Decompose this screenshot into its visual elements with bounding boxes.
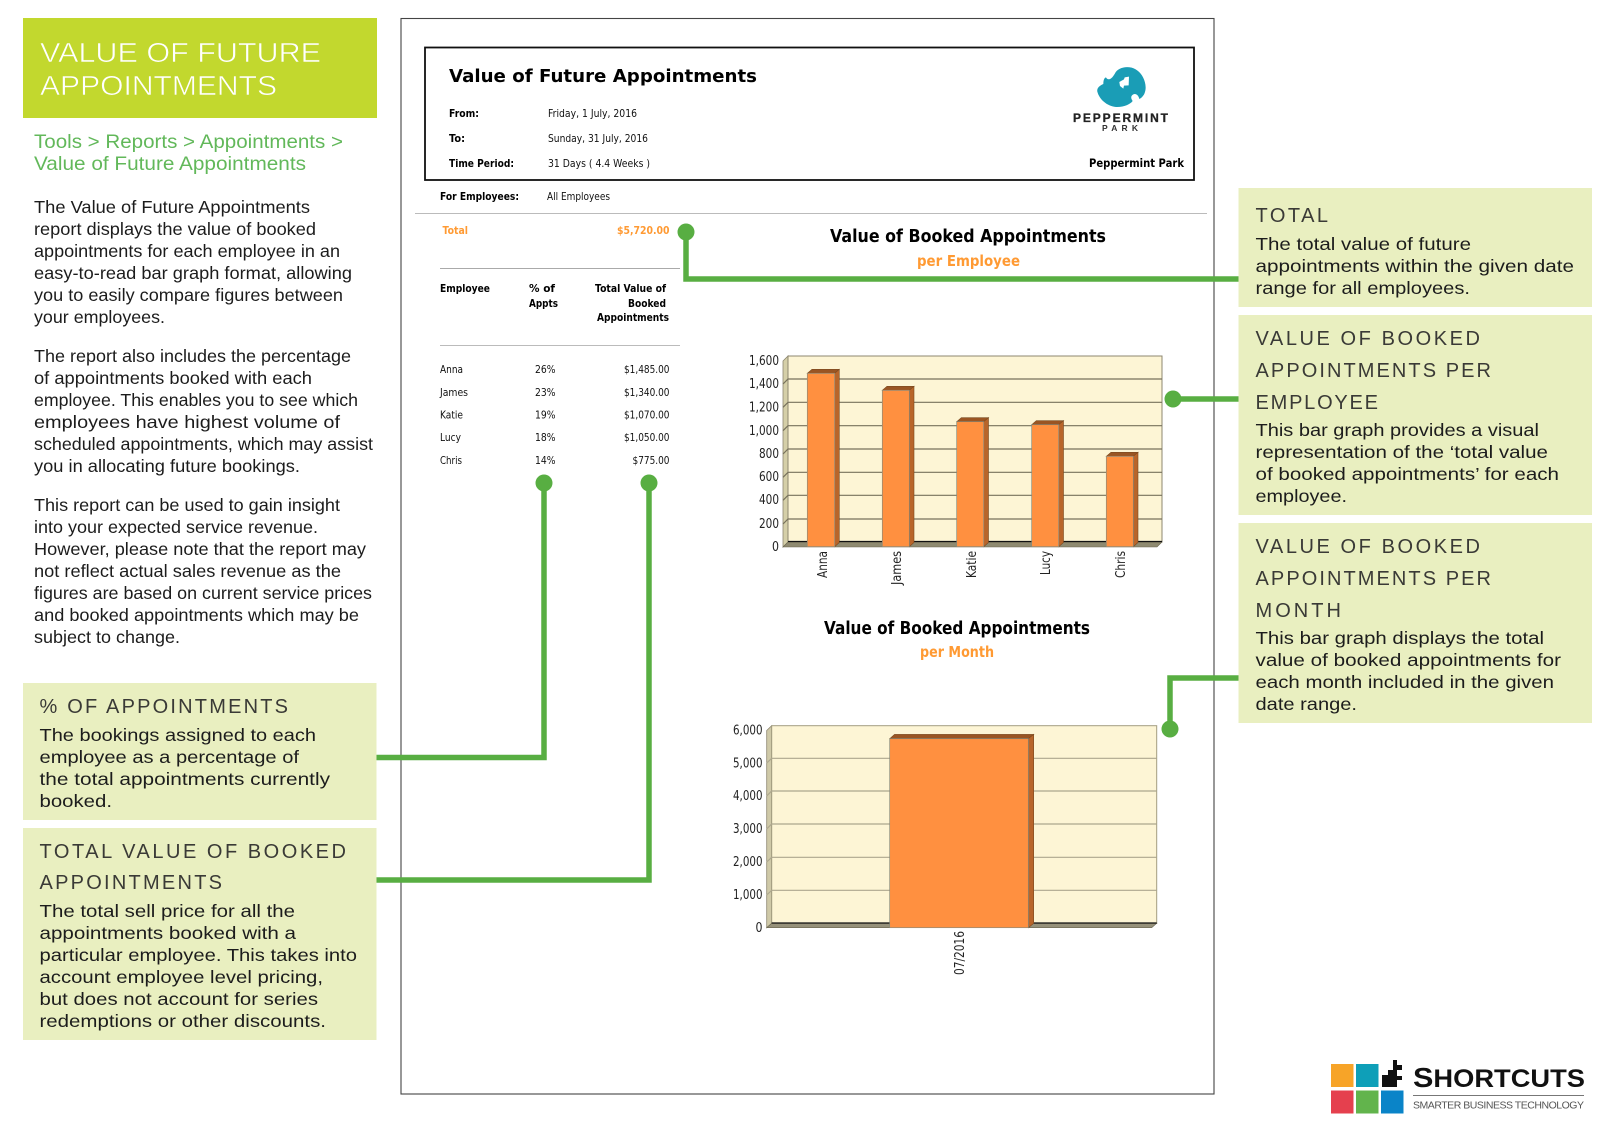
panel: total value of booked appointments: APPOINTMENTS xyxy=(40,872,222,894)
heading: booked appointments per employee xyxy=(830,226,1106,270)
panel: percent of appointments: booked. xyxy=(40,791,112,811)
y axis labels: 5,000 xyxy=(733,756,762,771)
connector: total xyxy=(678,224,1238,279)
y axis labels: 3,000 xyxy=(733,822,762,837)
panel: value per month: This bar graph displays the total xyxy=(1256,628,1544,648)
employee filter row xyxy=(415,191,1207,214)
y axis labels: 800 xyxy=(759,447,779,462)
panel: total value of booked appointments: redemptions or other discounts. xyxy=(40,1011,326,1031)
intro text block: your employees. xyxy=(34,307,165,327)
panel: total value of booked appointments xyxy=(23,828,376,1040)
panel: percent of appointments: the total appointments currently xyxy=(40,769,330,789)
icon: Peppermint Park logo: PARK xyxy=(1102,123,1139,133)
bar chart: value per month xyxy=(733,723,1157,975)
intro text block: appointments for each employee in an xyxy=(34,241,340,261)
intro text block: you to easily compare figures between xyxy=(34,285,343,305)
title banner xyxy=(23,18,377,118)
panel: value per employee: This bar graph provides a visual xyxy=(1256,420,1539,440)
panel: value per month: VALUE OF BOOKED xyxy=(1256,536,1480,558)
panel: total: The total value of future xyxy=(1256,234,1471,254)
employee table: $775.00 xyxy=(632,455,670,467)
panel: value per employee: employee. xyxy=(1256,486,1347,506)
employee filter row: All Employees xyxy=(547,191,610,203)
panel: percent of appointments: employee as a percentage of xyxy=(40,747,299,767)
panel: value per employee: VALUE OF BOOKED xyxy=(1256,328,1480,350)
bar: James xyxy=(882,386,914,547)
service revenue note text block: into your expected service revenue. xyxy=(34,517,318,537)
employee table: 18% xyxy=(535,432,556,444)
panel: value per month: each month included in the given xyxy=(1256,672,1554,692)
panel: value per employee xyxy=(1238,315,1592,515)
y axis labels: 400 xyxy=(759,493,779,508)
panel: total value of booked appointments: TOTAL VALUE OF BOOKED xyxy=(40,841,346,863)
x axis labels: Katie xyxy=(965,551,980,578)
heading: booked appointments per month xyxy=(824,618,1090,661)
heading: booked appointments per employee: Value of Booked Appointments xyxy=(830,226,1106,247)
panel: total value of booked appointments: but does not account for series xyxy=(40,989,318,1009)
employee table: 14% xyxy=(535,455,556,467)
breadcrumb navigation path: Tools > Reports > Appointments > xyxy=(34,131,343,153)
x axis labels: Anna xyxy=(816,551,831,578)
y axis labels: 4,000 xyxy=(733,789,762,804)
report header box: Value of Future Appointments xyxy=(449,66,757,87)
y axis labels: 1,000 xyxy=(749,424,779,439)
intro text block xyxy=(34,197,352,327)
panel: total value of booked appointments: The total sell price for all the xyxy=(40,901,295,921)
y axis labels: 1,000 xyxy=(733,888,762,903)
connector: percent of appointments xyxy=(376,474,552,758)
icon: Shortcuts logo: SHORTCUTS xyxy=(1413,1062,1585,1093)
employee table: Katie xyxy=(440,410,463,422)
x axis labels xyxy=(816,551,1129,586)
panel: total: range for all employees. xyxy=(1256,278,1470,298)
employee table: 23% xyxy=(535,387,556,399)
employee table: Appointments xyxy=(597,312,669,324)
heading: booked appointments per month: per Month xyxy=(920,643,994,661)
bar: Lucy xyxy=(1032,421,1064,547)
x axis labels: James xyxy=(890,551,905,586)
title banner: APPOINTMENTS xyxy=(40,70,277,101)
service revenue note text block: figures are based on current service prices xyxy=(34,583,372,603)
report header box: Sunday, 31 July, 2016 xyxy=(548,133,648,145)
report header box: To: xyxy=(449,133,465,145)
heading: booked appointments per month: Value of Booked Appointments xyxy=(824,618,1090,639)
bar: Anna xyxy=(807,369,839,547)
y axis labels xyxy=(749,354,779,555)
total row: Total xyxy=(442,225,468,237)
percentage explanation text block: employees have highest volume of xyxy=(34,412,340,432)
y axis labels: 1,400 xyxy=(749,377,779,392)
employee table: Employee xyxy=(440,283,490,295)
icon: Peppermint Park logo xyxy=(1073,67,1169,133)
panel: value per month: APPOINTMENTS PER xyxy=(1256,568,1491,590)
service revenue note text block: not reflect actual sales revenue as the xyxy=(34,561,341,581)
employee table: Appts xyxy=(529,298,558,310)
y axis labels: 2,000 xyxy=(733,855,762,870)
breadcrumb navigation path: Value of Future Appointments xyxy=(34,153,306,175)
report header box: 31 Days ( 4.4 Weeks ) xyxy=(548,158,650,170)
y axis labels: 0 xyxy=(772,540,779,555)
report header box: Friday, 1 July, 2016 xyxy=(548,108,637,120)
icon: Shortcuts logo: SMARTER BUSINESS TECHNOLOGY xyxy=(1413,1100,1584,1112)
employee table: $1,485.00 xyxy=(624,364,670,376)
panel: total value of booked appointments: account employee level pricing, xyxy=(40,967,323,987)
employee table: $1,050.00 xyxy=(624,432,670,444)
employee table: $1,340.00 xyxy=(624,387,670,399)
connector: value per employee xyxy=(1164,390,1238,408)
service revenue note text block xyxy=(34,495,372,647)
y axis labels: 6,000 xyxy=(733,723,762,738)
employee table xyxy=(439,268,680,467)
bar: 07/2016 xyxy=(890,734,1034,928)
employee table: $1,070.00 xyxy=(624,410,670,422)
connector: value per month xyxy=(1162,678,1238,738)
percentage explanation text block xyxy=(34,346,373,476)
percentage explanation text block: scheduled appointments, which may assist xyxy=(34,434,373,454)
employee filter row: For Employees: xyxy=(440,191,519,203)
y axis labels: 200 xyxy=(759,517,779,532)
y axis labels: 1,200 xyxy=(749,400,779,416)
report header box: Peppermint Park xyxy=(1089,156,1184,170)
icon: Peppermint Park logo: PEPPERMINT xyxy=(1073,111,1169,125)
x axis labels: Chris xyxy=(1114,551,1129,578)
employee table: James xyxy=(439,387,468,399)
panel: total xyxy=(1238,188,1592,307)
employee table: Booked xyxy=(628,298,666,310)
intro text block: easy-to-read bar graph format, allowing xyxy=(34,263,352,283)
title banner: VALUE OF FUTURE xyxy=(40,37,321,68)
panel: value per employee: of booked appointments’ for each xyxy=(1256,464,1559,484)
employee table: Total Value of xyxy=(595,283,666,295)
panel: total value of booked appointments: appointments booked with a xyxy=(40,923,296,943)
percentage explanation text block: employee. This enables you to see which xyxy=(34,390,358,410)
panel: total value of booked appointments: particular employee. This takes into xyxy=(40,945,357,965)
heading: booked appointments per employee: per Employee xyxy=(917,252,1020,270)
employee table: Lucy xyxy=(440,432,461,444)
panel: value per month: date range. xyxy=(1256,694,1357,714)
service revenue note text block: subject to change. xyxy=(34,627,180,647)
total row: $5,720.00 xyxy=(617,225,670,237)
connector: total value of booked appointments xyxy=(376,474,658,880)
x axis label: 07/2016 xyxy=(953,931,968,975)
panel: percent of appointments: The bookings assigned to each xyxy=(40,725,316,745)
percentage explanation text block: of appointments booked with each xyxy=(34,368,312,388)
bar: Chris xyxy=(1106,452,1138,547)
y axis labels xyxy=(733,723,762,936)
report header box: From: xyxy=(449,108,479,120)
panel: report page xyxy=(401,18,1214,1094)
y axis labels: 0 xyxy=(756,921,762,936)
employee table: 26% xyxy=(535,364,556,376)
panel: total: appointments within the given date xyxy=(1256,256,1574,276)
panel: value per month: MONTH xyxy=(1256,600,1341,622)
report header box xyxy=(425,48,1194,180)
service revenue note text block: This report can be used to gain insight xyxy=(34,495,340,515)
service revenue note text block: However, please note that the report may xyxy=(34,539,366,559)
panel: value per month: value of booked appointments for xyxy=(1256,650,1561,670)
percentage explanation text block: you in allocating future bookings. xyxy=(34,456,300,476)
employee table: 19% xyxy=(535,410,556,422)
panel: percent of appointments xyxy=(23,683,376,820)
total row xyxy=(442,225,670,237)
employee table: Anna xyxy=(440,364,463,376)
employee table: Chris xyxy=(440,455,462,467)
panel: total: TOTAL xyxy=(1256,205,1328,227)
panel: value per employee: APPOINTMENTS PER xyxy=(1256,360,1491,382)
y axis labels: 600 xyxy=(759,470,779,485)
bar chart: value per employee xyxy=(749,354,1162,586)
icon: Shortcuts logo xyxy=(1331,1060,1585,1114)
percentage explanation text block: The report also includes the percentage xyxy=(34,346,351,366)
employee table: % of xyxy=(529,283,555,295)
panel: percent of appointments: % OF APPOINTMENTS xyxy=(40,696,288,718)
intro text block: The Value of Future Appointments xyxy=(34,197,310,217)
panel: value per employee: EMPLOYEE xyxy=(1256,392,1378,414)
panel: value per month xyxy=(1238,523,1592,723)
bar: Katie xyxy=(957,418,988,547)
panel: value per employee: representation of the ‘total value xyxy=(1256,442,1548,462)
intro text block: report displays the value of booked xyxy=(34,219,316,239)
service revenue note text block: and booked appointments which may be xyxy=(34,605,359,625)
x axis labels: Lucy xyxy=(1039,551,1054,575)
breadcrumb navigation path xyxy=(34,131,343,175)
y axis labels: 1,600 xyxy=(749,354,779,369)
report header box: Time Period: xyxy=(449,158,514,170)
